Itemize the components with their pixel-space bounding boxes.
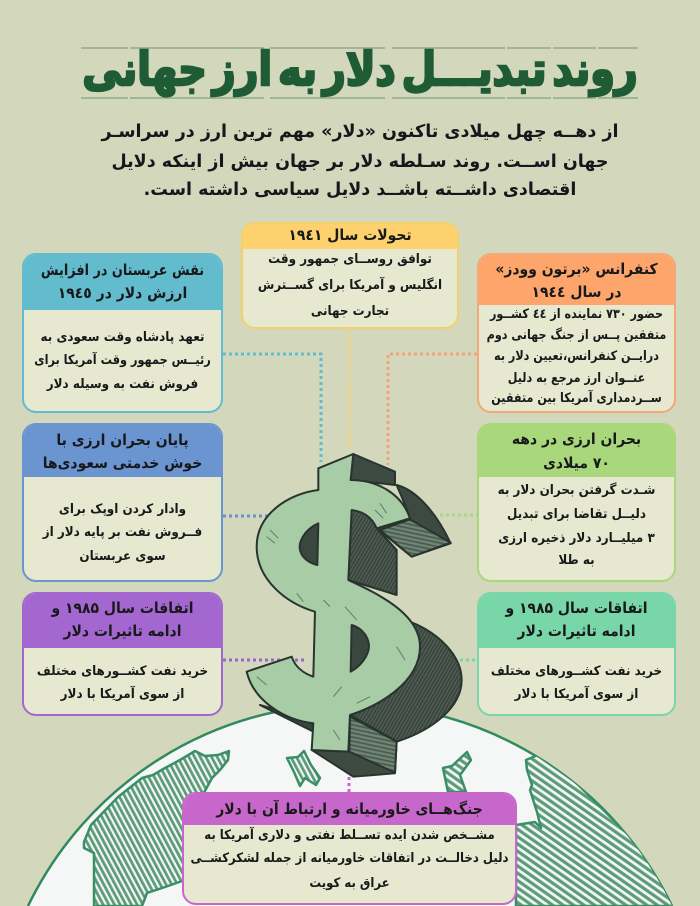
panel: Middle East wars: جنگ‌هــای خاورمیانه و ارتباط آن با دلار xyxy=(216,800,483,818)
panel: Bretton Woods conference: متفقین پــس از جنگ جهانی دوم xyxy=(487,328,666,343)
panel: role of Saudi Arabia: فروش نفت به وسیله دلار xyxy=(47,377,198,392)
panel: events of 1985, green: ادامه تاثیرات دلار xyxy=(517,622,635,640)
intro text: از دهــه چهل میلادی تاکنون «دلار» مهم ترین ارز در سراسـر xyxy=(101,122,619,142)
panel: Bretton Woods conference: ســردمداری آمریکا بین متفقین xyxy=(491,391,662,406)
panel: developments of 1941: توافق روســای جمهور وقت xyxy=(268,252,432,267)
panel: currency crisis of the 70s: ۷۰ میلادی xyxy=(543,454,610,472)
panel: role of Saudi Arabia: تعهد پادشاه وقت سعودی به xyxy=(41,330,204,345)
panel: role of Saudi Arabia: ارزش دلار در ۱۹٤٥ xyxy=(58,284,187,302)
intro text: اقتصادی داشــته باشــد دلایل سیاسی داشته است. xyxy=(144,180,576,200)
panel: developments of 1941 xyxy=(241,222,459,329)
panel: events of 1985, green: اتفاقات سال ۱۹۸۵ و xyxy=(505,599,648,617)
panel: currency crisis of the 70s: به طلا xyxy=(558,553,595,568)
globe xyxy=(28,704,700,906)
panel: currency crisis of the 70s: شـدت گرفتن بحران دلار به xyxy=(498,483,655,498)
panel: Middle East wars: عراق به کویت xyxy=(309,876,390,891)
panel: events of 1985, purple: از سوی آمریکا با دلار xyxy=(61,687,184,702)
panel: Bretton Woods conference: عنــوان ارز مرجع به دلیل xyxy=(508,371,645,386)
title rules xyxy=(81,48,638,98)
panel: events of 1985, green: از سوی آمریکا با دلار xyxy=(515,687,638,702)
intro text: جهان اســت. روند سـلطه دلار بر جهان بیش از اینکه دلایل xyxy=(111,152,608,172)
panel: role of Saudi Arabia xyxy=(22,253,223,413)
icon: dollar sign xyxy=(247,454,462,777)
panel: Bretton Woods conference: کنفرانس «برتون وودز» xyxy=(495,260,658,278)
panel: end of currency crisis: پایان بحران ارزی با xyxy=(56,431,189,449)
panel: events of 1985, purple: اتفاقات سال ۱۹۸۵ و xyxy=(51,599,194,617)
panel: currency crisis of the 70s: دلیــل تقاضا برای تبدیل xyxy=(507,507,646,522)
panel: Bretton Woods conference: حضور ۷۳۰ نماینده از ٤٤ کشــور xyxy=(490,307,663,322)
intro text xyxy=(100,122,619,200)
panel: developments of 1941: تحولات سال ۱۹٤۱ xyxy=(288,226,412,244)
panel: end of currency crisis: سوی عربستان xyxy=(79,549,166,564)
panel: role of Saudi Arabia: رئیــس جمهور وقت آمریکا برای xyxy=(34,353,211,368)
panel: developments of 1941: انگلیس و آمریکا برای گســترش xyxy=(258,278,442,293)
panel: Bretton Woods conference: در سال ۱۹٤٤ xyxy=(531,283,622,301)
panel: Bretton Woods conference: درایــن کنفرانس،تعیین دلار به xyxy=(494,349,659,364)
panel: Bretton Woods conference xyxy=(477,253,676,413)
panel: developments of 1941: تجارت جهانی xyxy=(311,304,389,319)
panel: Middle East wars: مشــخص شدن ایده تســلط نفتی و دلاری آمریکا به xyxy=(204,828,495,843)
connector lines xyxy=(223,330,477,792)
illustration: globe, connectors and dollar sign xyxy=(26,330,673,906)
panel: events of 1985, purple xyxy=(22,592,223,716)
panel: events of 1985, purple: ادامه تاثیرات دلار xyxy=(63,622,181,640)
panel: events of 1985, green: خرید نفت کشــورهای مختلف xyxy=(491,664,662,679)
panel: Middle East wars xyxy=(182,792,517,905)
panel: end of currency crisis xyxy=(22,423,223,582)
panel: currency crisis of the 70s xyxy=(477,423,676,582)
panel: currency crisis of the 70s: ۳ میلیــارد دلار ذخیره ارزی xyxy=(498,531,655,546)
panel: Middle East wars: دلیل دخالــت در اتفاقات خاورمیانه از جمله لشکرکشــی xyxy=(190,851,509,866)
panel: events of 1985, purple: خرید نفت کشــورهای مختلف xyxy=(37,664,208,679)
panel: events of 1985, green xyxy=(477,592,676,716)
panel: currency crisis of the 70s: بحران ارزی در دهه xyxy=(512,430,641,448)
title: روند تبدیـــل دلار به ارز جهانی xyxy=(82,42,637,96)
panel: end of currency crisis: وادار کردن اوپک برای xyxy=(59,502,186,517)
panel: end of currency crisis: فــروش نفت بر پایه دلار از xyxy=(43,525,202,540)
panel: end of currency crisis: خوش خدمتی سعودی‌ها xyxy=(43,454,202,472)
panel: role of Saudi Arabia: نقش عربستان در افزایش xyxy=(41,261,204,279)
